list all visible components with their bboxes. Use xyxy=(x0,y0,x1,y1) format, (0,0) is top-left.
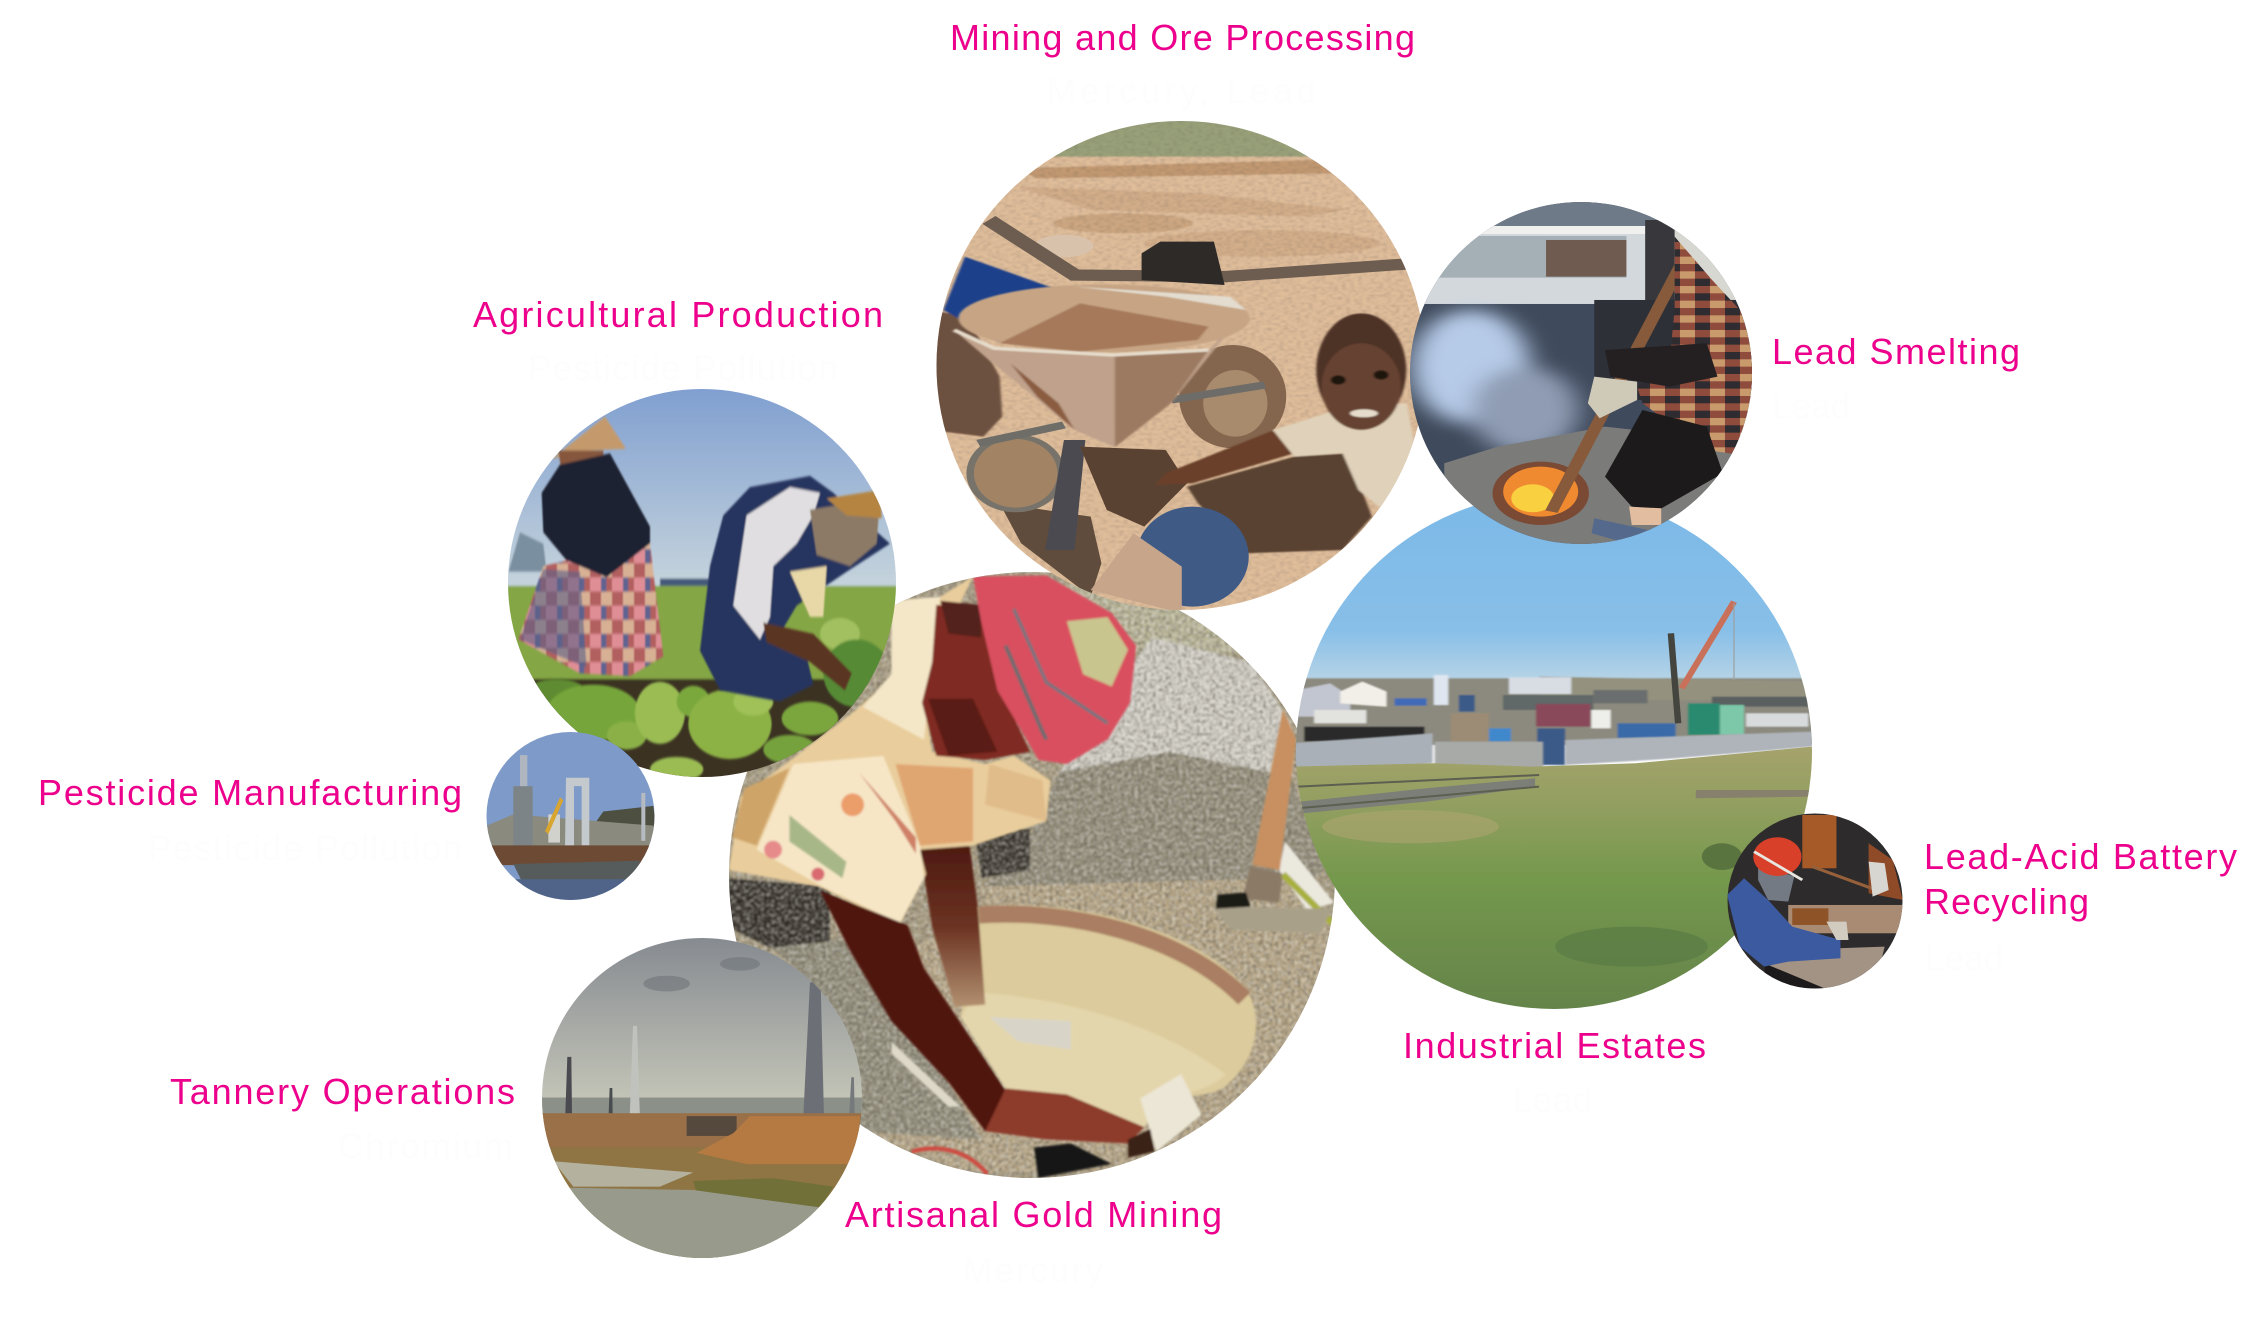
woman's patterned dress xyxy=(729,576,1050,925)
photo circle: industrial estates xyxy=(1290,500,1820,1013)
label: tannery operations: Tannery Operations xyxy=(170,1071,515,1112)
pollutant: lead: Lead xyxy=(1772,387,1850,426)
worker xyxy=(1588,237,1752,542)
machine base xyxy=(1004,508,1102,593)
woman's face xyxy=(922,605,1030,760)
person at left and blue sleeve xyxy=(936,256,1052,438)
seated man xyxy=(1155,313,1417,553)
label: pesticide manufacturing: Pesticide Manufacturing xyxy=(38,772,462,813)
photo circle: artisanal gold mining xyxy=(729,572,1335,1178)
left wheel and machine frame xyxy=(970,425,1187,550)
chimneys xyxy=(565,982,855,1119)
pollutant: mercury: Mercury xyxy=(963,1251,1104,1290)
pollutant: lead: Lead xyxy=(1925,939,2003,978)
woman in straw hat xyxy=(518,417,663,676)
estate buildings xyxy=(1290,675,1820,765)
worker with red helmet xyxy=(1727,837,1849,967)
bench with rusty metal xyxy=(1764,905,1903,990)
cloth and tools at bottom xyxy=(912,1074,1201,1178)
refinery towers xyxy=(513,755,645,848)
perimeter fences xyxy=(1290,732,1812,768)
water xyxy=(515,879,626,900)
label: agricultural production: Agricultural Production xyxy=(473,294,883,335)
photo circle: lead-acid battery recycling xyxy=(1720,807,1909,993)
crane and pile driver xyxy=(1671,602,1734,723)
pollutant: pesticide pollution: Pesticide Pollution xyxy=(528,349,838,388)
woman's near arm and hand xyxy=(820,890,1144,1143)
photo circle: mining and ore processing xyxy=(930,110,1428,620)
stirring pole xyxy=(1551,267,1680,512)
red headscarf xyxy=(973,576,1136,764)
label: lead smelting: Lead Smelting xyxy=(1772,331,2020,372)
brick kiln ground xyxy=(537,1113,870,1266)
photo circle: lead smelting xyxy=(1401,197,1766,550)
ship xyxy=(513,861,640,881)
pipe and pump xyxy=(989,220,1407,285)
photo circle: tannery operations xyxy=(537,936,870,1266)
photo circle: agricultural production xyxy=(500,380,907,782)
blue motor xyxy=(1136,507,1249,607)
pond water xyxy=(555,1161,819,1258)
label: lead-acid battery recycling, second line: Recycling xyxy=(1924,881,2089,922)
cloth at bottom xyxy=(1091,533,1182,613)
bowl of gold slurry xyxy=(891,905,1256,1127)
label: lead-acid battery recycling: Lead-Acid Battery xyxy=(1924,836,2237,877)
hoe xyxy=(1214,709,1334,933)
grass field xyxy=(1290,747,1820,1013)
woman bending over crops xyxy=(700,476,890,702)
corrugated roof edge and wall xyxy=(1424,220,1752,400)
label: mining and ore processing: Mining and Ore Processing xyxy=(950,17,1415,58)
pollutant: chromium: Chromium xyxy=(338,1127,513,1166)
label: industrial estates: Industrial Estates xyxy=(1403,1025,1706,1066)
smoke xyxy=(1412,310,1578,453)
lettuce rows xyxy=(527,618,890,782)
label: artisanal gold mining: Artisanal Gold Mining xyxy=(845,1194,1222,1235)
road and fencing xyxy=(1298,775,1812,813)
hopper funnel xyxy=(954,284,1250,447)
photo circle: pesticide manufacturing xyxy=(486,732,654,900)
right flywheel and belt xyxy=(1171,345,1286,448)
woman's far arm xyxy=(920,846,985,1007)
pollutant: mercury and lead: Mercury, Lead xyxy=(1047,72,1316,111)
rock xyxy=(1034,235,1093,257)
pollutant: lead: Lead xyxy=(1513,1081,1592,1120)
ground xyxy=(1444,427,1755,550)
furnace fire xyxy=(1492,462,1589,525)
pollutant: pesticide pollution: Pesticide Pollution xyxy=(148,829,462,868)
